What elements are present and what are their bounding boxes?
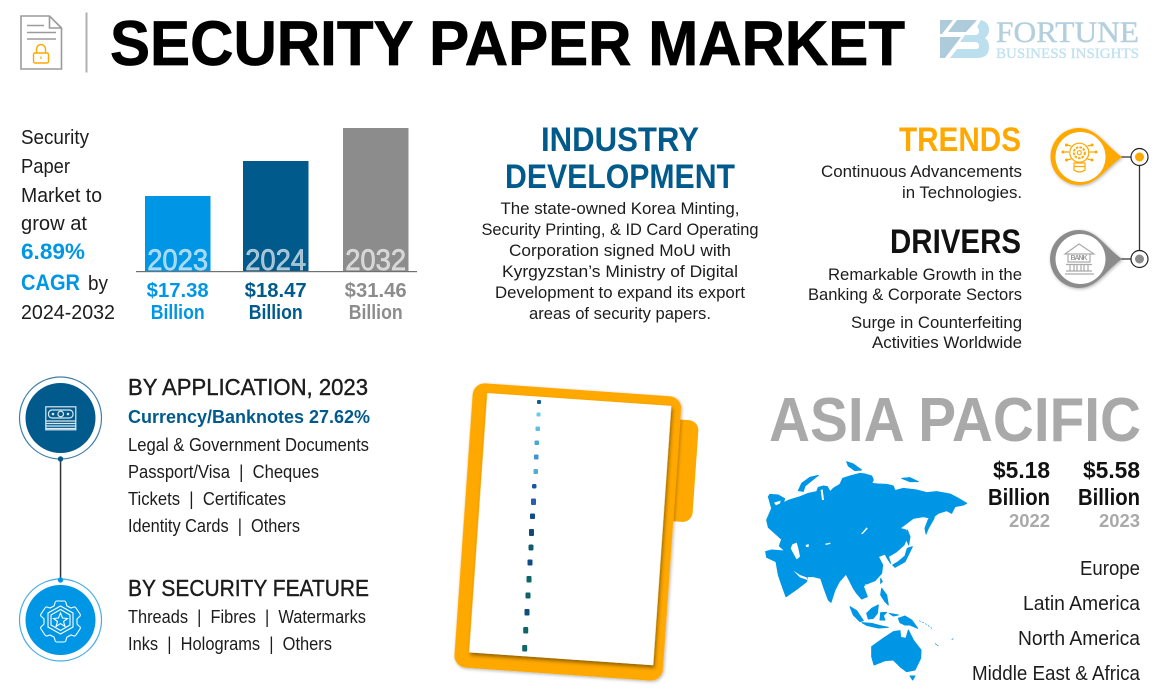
body text: Corporation signed MoU with	[509, 241, 731, 260]
list: other regions	[972, 558, 1141, 685]
bar 2032: Billion	[349, 302, 403, 324]
value: 2023: $5.58	[1083, 457, 1140, 483]
panel: trends: in Technologies.	[902, 183, 1022, 202]
body text	[482, 199, 758, 323]
bar 2032	[343, 128, 408, 324]
body text: Kyrgyzstan’s Ministry of Digital	[502, 262, 738, 281]
icon: security gear	[20, 577, 102, 661]
text: CAGR statement: by	[88, 273, 108, 295]
body text: Development to expand its export	[495, 283, 745, 302]
value: 2023: Billion	[1078, 484, 1140, 510]
icon: drivers bank	[1050, 230, 1148, 288]
bar 2032: $31.46	[345, 280, 407, 302]
title: SECURITY PAPER MARKET	[110, 9, 905, 79]
text: CAGR statement: Paper	[21, 156, 70, 178]
text: CAGR statement: 2024-2032	[21, 302, 115, 324]
map cutouts: inland seas	[774, 489, 869, 588]
panel: trends: TRENDS	[899, 121, 1021, 159]
connector: trends to drivers	[1116, 157, 1140, 259]
panel: by security feature: BY SECURITY FEATURE	[128, 575, 369, 601]
value: 2022	[988, 457, 1050, 531]
bar 2024: 2024	[245, 244, 306, 277]
bar 2023: 2023	[147, 244, 208, 277]
text: CAGR statement: 6.89%	[21, 239, 85, 264]
text: CAGR statement	[21, 127, 115, 324]
panel: drivers	[808, 223, 1022, 352]
heading: DEVELOPMENT	[505, 158, 735, 196]
panel: by application	[128, 374, 370, 536]
panel: drivers: Remarkable Growth in the	[828, 265, 1022, 284]
text: CAGR statement: grow at	[21, 213, 87, 235]
panel: industry development	[482, 121, 758, 323]
paper dots	[522, 400, 541, 652]
icon: trends light bulb	[1050, 128, 1148, 185]
panel: by application: Identity Cards | Others	[128, 516, 300, 536]
body text: areas of security papers.	[529, 304, 711, 323]
body text: Security Printing, & ID Card Operating	[482, 220, 758, 239]
list: other regions: Latin America	[1023, 593, 1141, 615]
value: 2023: 2023	[1099, 511, 1140, 531]
body text: The state-owned Korea Minting,	[500, 199, 740, 218]
heading	[505, 121, 735, 196]
list: other regions: Middle East & Africa	[972, 663, 1141, 685]
panel: by security feature: Threads | Fibres | Watermarks	[128, 607, 366, 627]
panel: drivers: Banking & Corporate Sectors	[808, 285, 1022, 304]
heading: INDUSTRY	[541, 121, 699, 159]
bar 2023: Billion	[151, 302, 205, 324]
panel: drivers: Surge in Counterfeiting	[851, 313, 1022, 332]
panel: drivers: Activities Worldwide	[872, 333, 1022, 352]
value: 2023	[1078, 457, 1140, 531]
logo: Fortune Business Insights: FORTUNE	[996, 16, 1139, 49]
icon: banknotes	[20, 377, 102, 462]
bar 2023: $17.38	[147, 280, 209, 302]
bar 2024: $18.47	[245, 280, 307, 302]
panel: by application: Currency/Banknotes 27.62%	[128, 407, 370, 427]
panel: trends: Continuous Advancements	[821, 162, 1022, 181]
panel: by application: BY APPLICATION, 2023	[128, 374, 368, 400]
panel: by application: Passport/Visa | Cheques	[128, 462, 319, 482]
list: other regions: Europe	[1080, 558, 1140, 580]
bar 2023	[145, 196, 210, 324]
text: CAGR statement: CAGR	[21, 270, 80, 295]
bar 2024: Billion	[249, 302, 303, 324]
text: CAGR statement: Security	[21, 127, 89, 149]
panel: by security feature: Inks | Holograms | Others	[128, 634, 332, 654]
logo: Fortune Business Insights: BUSINESS INSIGHTS	[996, 46, 1139, 62]
panel: by application: Tickets | Certificates	[128, 489, 286, 509]
icon: secured document	[21, 16, 62, 69]
value: 2022: Billion	[988, 484, 1050, 510]
bar 2024	[243, 161, 308, 324]
panel: trends	[821, 121, 1022, 202]
folder with paper	[454, 383, 701, 683]
map: Asia Pacific	[766, 462, 967, 680]
value: 2022: 2022	[1009, 511, 1050, 531]
list: other regions: North America	[1018, 628, 1141, 650]
bar chart: market size	[136, 128, 417, 324]
connector: left icons	[60, 460, 61, 580]
value: 2022: $5.18	[993, 457, 1050, 483]
logo: Fortune Business Insights	[940, 16, 1139, 62]
icon: drivers bank: BANK	[1070, 255, 1088, 262]
bar 2032: 2032	[345, 244, 406, 277]
panel: by security feature	[128, 575, 369, 654]
panel: by application: Legal & Government Documents	[128, 435, 369, 455]
panel: drivers: DRIVERS	[890, 223, 1021, 261]
text: CAGR statement: Market to	[21, 185, 102, 207]
